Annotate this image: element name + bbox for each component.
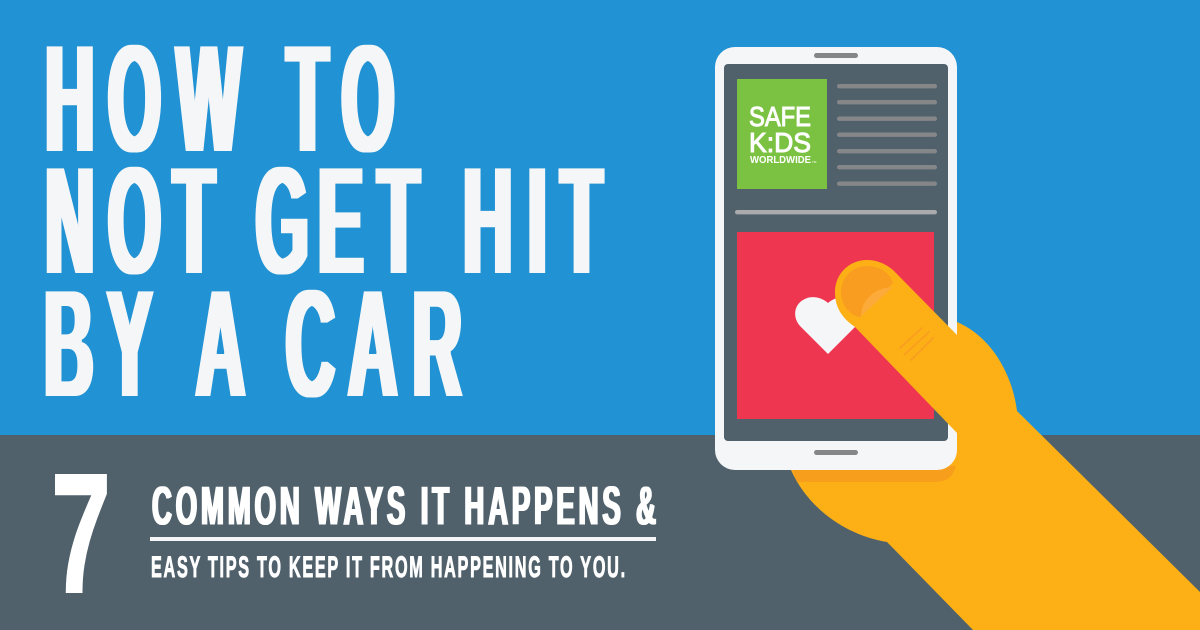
title: NOT GET HIT: [45, 135, 602, 308]
subtitle: common ways: COMMON WAYS IT HAPPENS &: [152, 476, 656, 537]
nail highlight: [861, 287, 893, 316]
bottom speaker: [814, 450, 858, 455]
icon: heart: [795, 297, 861, 354]
safe kids logo: [737, 79, 827, 189]
phone: [715, 47, 957, 470]
title: [44, 13, 602, 431]
bottom band: [0, 435, 1200, 630]
safe kids logo: WORLDWIDE: [750, 155, 811, 166]
article text lines: [837, 84, 937, 186]
subtitle rule: [150, 537, 656, 541]
subtitle: easy tips: EASY TIPS TO KEEP IT FROM HAPPENING TO YOU.: [151, 551, 625, 584]
fingernail: [841, 266, 893, 317]
divider: [735, 210, 937, 214]
phone body: [715, 47, 957, 470]
top speaker: [814, 53, 858, 58]
safe kids logo: K:DS: [749, 127, 811, 158]
title: HOW TO: [45, 13, 394, 186]
safe kids logo: TM: [812, 160, 817, 164]
safe kids logo: SAFE: [749, 101, 811, 132]
red panel: [737, 232, 934, 419]
phone shadow: [791, 462, 956, 482]
big number 7: 7: [51, 439, 111, 629]
pointing finger: [835, 260, 990, 433]
title: BY A CAR: [44, 258, 462, 431]
hand palm: [791, 322, 1200, 630]
finger creases: [900, 328, 933, 360]
finger shape: [835, 260, 990, 433]
phone screen: [724, 64, 948, 441]
